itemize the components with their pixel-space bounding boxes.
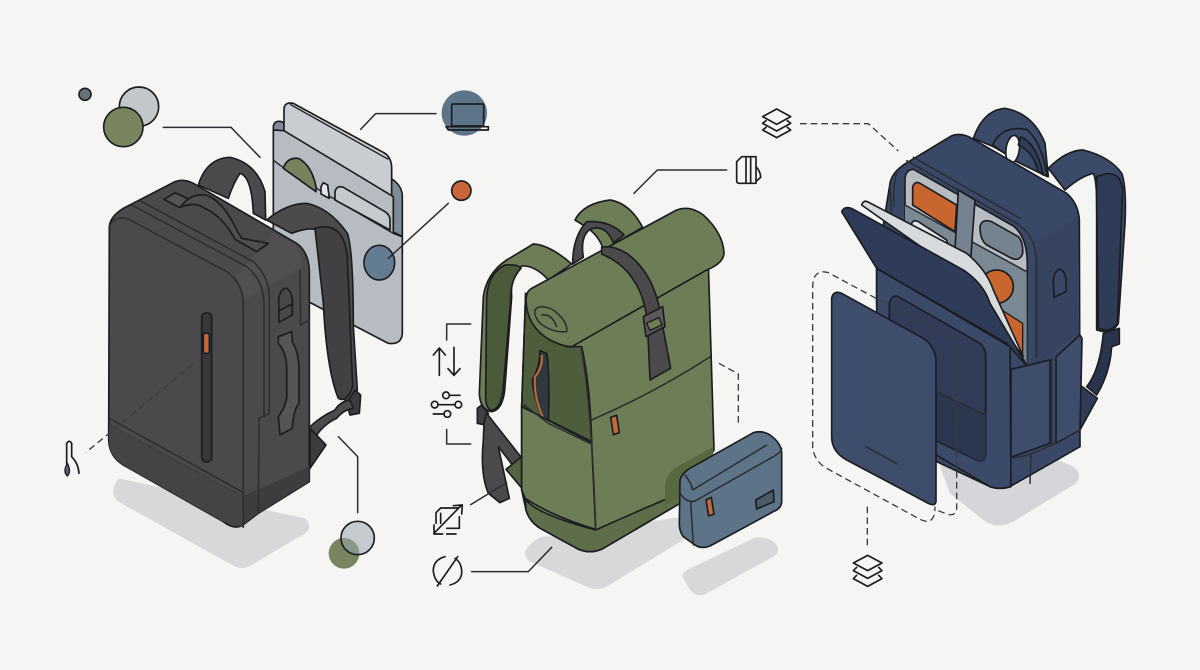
roll top (526, 208, 724, 347)
icon: layered stack top (763, 109, 791, 138)
drop shadow: black backpack (113, 478, 309, 568)
pouch (679, 432, 782, 547)
icon: orange dot (452, 181, 471, 200)
detached panel (832, 292, 936, 505)
leader line: strap anchor to circles (338, 437, 358, 513)
base panel (525, 493, 680, 552)
drop shadow: green backpack (525, 517, 683, 589)
orange zip pull (611, 415, 619, 435)
side mesh pocket with orange trim (532, 351, 549, 423)
dark side panel (522, 293, 592, 442)
panel: navy clamshell backpack (763, 108, 1125, 586)
front pocket seam (592, 357, 711, 420)
front panel of open bag (877, 268, 1011, 488)
icon: empty circle slash (433, 557, 462, 586)
icon: overlapping grey and olive circles (104, 87, 159, 147)
side belt panels (1011, 335, 1082, 457)
icon: small bag (737, 157, 761, 183)
panel: black backpack with laptop sleeve (65, 87, 488, 569)
laptop sleeve (273, 103, 402, 344)
backpack body (109, 180, 309, 527)
inner window pocket (889, 296, 986, 461)
dashed outline: pocket position (882, 301, 957, 515)
far shoulder strap (575, 200, 643, 250)
icon: laptop in circle (442, 90, 488, 136)
bracket bottom (447, 429, 471, 444)
dashed leader (86, 364, 193, 452)
base (1011, 430, 1080, 483)
icon: sliders network (431, 392, 462, 417)
leader line: circles to bag (163, 127, 260, 157)
leader: dashed from stack icon (800, 124, 898, 151)
icon: overlapping circles bottom (329, 521, 374, 569)
roll top strap and buckle (602, 247, 671, 380)
right shoulder strap (1048, 150, 1125, 430)
paper sheet (862, 201, 1023, 357)
leader line: shadow icon (472, 547, 552, 572)
top carry handle (164, 193, 268, 252)
inner dark strap (573, 221, 624, 264)
shadow cast by pouch (665, 447, 713, 505)
stitched base seam (109, 418, 309, 496)
top straps (973, 108, 1048, 177)
backpack body (877, 135, 1080, 488)
backpack body (522, 263, 714, 552)
zipper edge (890, 157, 1037, 357)
icon: small slate dot (79, 88, 91, 100)
panel: green rolltop backpack with pouch (431, 157, 782, 595)
side lock (1053, 269, 1066, 297)
bag anchor tab (506, 457, 523, 490)
bracket top (447, 324, 471, 340)
drop shadow: navy backpack (938, 460, 1079, 525)
back top strap (198, 157, 266, 220)
side pocket (522, 407, 596, 529)
dashed outline: panel position (813, 272, 935, 521)
drop shadow: pouch (682, 537, 778, 595)
open interior with pockets (905, 169, 1027, 365)
icon: thermometer drop (65, 441, 79, 476)
side lock (279, 288, 292, 322)
icon: expand arrow over sheets (434, 505, 462, 534)
leader line: orange dot to sleeve (388, 203, 448, 258)
right shoulder strap (267, 203, 361, 468)
leader line: expand icon (471, 483, 507, 505)
vertical zipper with orange pull (202, 313, 212, 462)
dashed leader: pouch (719, 363, 738, 427)
front panel lines (109, 218, 243, 527)
icon: up and down arrows (433, 347, 460, 375)
leader line: laptop icon (361, 114, 436, 129)
open flap (842, 208, 1028, 367)
side handle (278, 332, 299, 435)
leader line: bag icon (634, 170, 727, 193)
leader: dashed to stack icon bottom (865, 507, 869, 546)
icon: layered stack bottom (853, 555, 882, 586)
left shoulder strap (477, 244, 572, 503)
roll spiral (535, 307, 567, 332)
